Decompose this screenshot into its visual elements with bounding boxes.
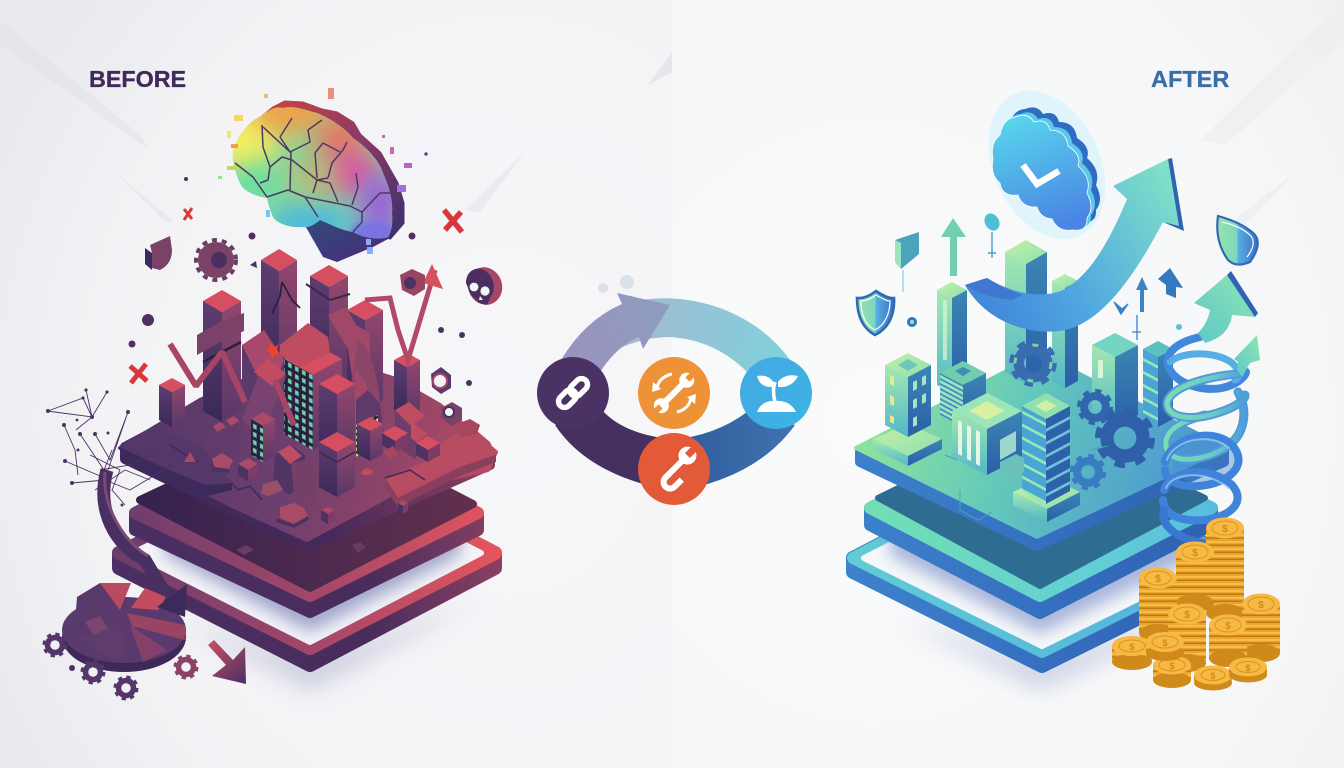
coin stack 8: [1146, 632, 1184, 661]
coin stack 4: $: [1258, 600, 1264, 611]
arrow head on pie: [157, 584, 187, 617]
platform layers: [119, 350, 496, 665]
arrow: purple progress arc: [561, 293, 670, 372]
lost gears: [44, 634, 196, 698]
coin stack 3: [1139, 568, 1177, 642]
cloud check badge: [966, 72, 1128, 258]
coin stack 4: [1242, 594, 1280, 662]
floating antenna box: [895, 232, 919, 292]
coin stack 5: $: [1184, 610, 1190, 621]
pixel fragments: [218, 88, 428, 254]
coin stack 2: [1176, 542, 1214, 612]
zigzag rising arrow: [365, 264, 443, 360]
panel: transition cycle: [537, 275, 812, 505]
growth arrow: [965, 158, 1184, 332]
coin stack 9: [1153, 656, 1191, 688]
platform layers: [853, 354, 1232, 666]
band: lower arc dark: [555, 410, 680, 492]
coin stack 9: $: [1169, 661, 1175, 671]
red crosses: [130, 208, 462, 383]
coin stack 11: $: [1245, 663, 1251, 673]
brain: [232, 100, 404, 262]
coin stack 1: $: [1222, 524, 1228, 535]
node: wrench: [638, 433, 710, 505]
raised broken plates: [120, 425, 496, 507]
broken network: [46, 388, 180, 506]
small rubble boxes: [184, 416, 480, 528]
panel: before scene: [44, 88, 507, 698]
zigzag falling red arrow: [170, 344, 294, 425]
central buildings: [952, 393, 1080, 522]
skull icon: [463, 262, 507, 310]
node: chain link: [537, 357, 609, 429]
ground shadow: [180, 600, 480, 690]
node: tools: [638, 357, 710, 429]
heading: before: BEFORE: [89, 66, 186, 92]
circuit traces: [945, 446, 1108, 520]
coin stack 5: [1168, 604, 1206, 672]
shield right: [1217, 216, 1258, 265]
ground shadow: [900, 600, 1230, 690]
cracks: [170, 445, 425, 500]
broken hex nuts: [400, 269, 462, 426]
floating shield: [145, 236, 172, 270]
coin stack 6: $: [1225, 621, 1231, 632]
coin stack 6: [1209, 614, 1247, 667]
band: teal return arc: [620, 298, 790, 372]
coin stack 11: [1229, 658, 1267, 682]
falling curved arrow: [104, 470, 170, 602]
coin stack 7: $: [1129, 642, 1135, 652]
spring top arrow: [1194, 271, 1258, 343]
coin stack 10: [1194, 666, 1232, 690]
balloon pin: [981, 211, 1003, 258]
down arrow: [208, 640, 246, 684]
coins: [1112, 518, 1280, 690]
node: sprout: [740, 357, 812, 429]
coin stack 10: $: [1210, 671, 1216, 681]
towers: [873, 240, 1173, 466]
up arrow left: [941, 218, 966, 276]
floating gear: [196, 240, 236, 280]
debris: [128, 152, 472, 386]
coin stack 3: $: [1155, 574, 1161, 585]
flame spark: [266, 343, 280, 358]
small rising arrows: [907, 268, 1183, 340]
shield left: [857, 291, 894, 335]
band: lower arc blue: [670, 412, 795, 492]
coin stack 8: $: [1162, 638, 1168, 648]
gears: [1013, 343, 1150, 487]
heading: after: AFTER: [1151, 66, 1229, 92]
coin stack 7: [1112, 636, 1152, 670]
coin stack 2: $: [1192, 548, 1198, 559]
pie chart: [62, 583, 186, 672]
spring: [1163, 337, 1246, 543]
towers and rubble: [159, 249, 428, 504]
cycle dots: [598, 275, 634, 293]
coin stack 1: [1206, 518, 1244, 622]
panel: after scene: [853, 72, 1280, 690]
spring side arrow: [1234, 335, 1260, 377]
